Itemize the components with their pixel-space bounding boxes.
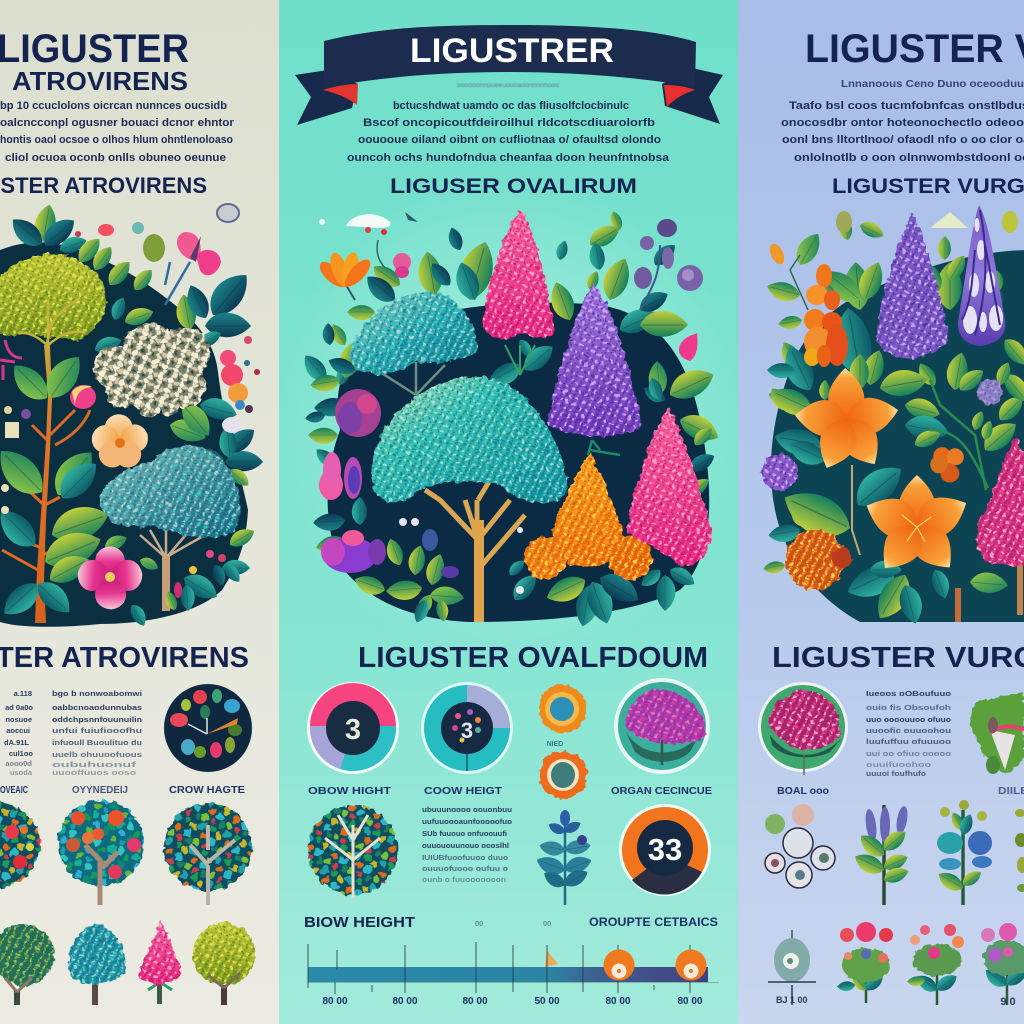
subtitle: Atrovirens: ATROVIRENS	[12, 66, 188, 96]
right text column: ouuifuoohoo	[866, 760, 932, 769]
small round tree	[0, 924, 54, 1005]
orange cone with balls	[524, 454, 652, 580]
intro text block: bp 10 ccuclolons oicrcan nunnces oucsidb	[0, 100, 227, 112]
intro text block: cliol ocuoa oconb onlls obuneo oeunue	[5, 152, 226, 164]
right text column	[866, 689, 952, 778]
pink cone two	[627, 408, 712, 566]
right intro text: onlolnotlb o oon olnnwombstdoonl oo	[794, 152, 1024, 164]
intro text block: hontis oaol ocsoe o olhos hlum ohntlenoloaso	[0, 134, 233, 146]
timeline labels: BIOW HEIGHT	[304, 914, 415, 931]
bouquet one	[837, 922, 893, 1003]
timeline bar	[308, 942, 719, 994]
timeline axis labels: 80 00	[322, 996, 348, 1007]
cell cluster icon	[765, 804, 835, 888]
chart labels: ORGAN CECINCUE	[611, 786, 712, 797]
magenta cluster	[976, 438, 1024, 615]
chart labels: COOW HEIGT	[424, 786, 502, 797]
orange gauge: 33	[648, 832, 682, 867]
text column two: oddchpsnnfouunuilin	[52, 715, 142, 724]
right intro text: onocosdbr ontor hoteonochectlo odeoos	[781, 117, 1024, 129]
intro text block: oalcncconpl ogusner bouaci dcnor ehntor	[0, 117, 235, 129]
label row: CROW HAGTE	[169, 785, 245, 796]
donut chart teal: 3	[461, 718, 473, 743]
timeline labels: OROUPTE CETBAICS	[589, 915, 718, 929]
purple dotted cone	[875, 213, 948, 358]
right text column: uuo oooouuoo ofuuo	[866, 715, 951, 724]
top right plant	[971, 692, 1024, 775]
cloud and specks	[319, 212, 418, 235]
small labels: BOAL ooo	[777, 786, 829, 797]
timeline axis labels: 80 00	[605, 996, 631, 1007]
panel: Liguster atrovirens	[0, 0, 279, 1024]
chart labels: OBOW HIGHT	[308, 786, 391, 797]
ribbon title: LIGUSTRER	[410, 32, 614, 70]
text column one: aooo0d	[5, 759, 32, 768]
small purple cluster	[978, 378, 1002, 406]
centre intro text	[347, 100, 670, 164]
donut chart teal	[421, 682, 513, 774]
text column one	[4, 689, 33, 777]
lilac bush roundel	[614, 678, 710, 774]
text column two: bgo b nonwoabomwi	[52, 689, 142, 698]
branching tree three	[164, 803, 252, 905]
intro text block	[0, 100, 235, 164]
right text column: ouio fis Obsoufoh	[866, 703, 952, 712]
botanical illustration: vurga	[762, 205, 1024, 626]
timeline axis labels: 50 00	[534, 996, 560, 1007]
timeline axis labels	[322, 996, 703, 1007]
tree crown: yellow green	[0, 254, 106, 340]
text column one: a.118	[14, 689, 32, 698]
orange spike flower	[804, 264, 848, 367]
centre text column	[422, 805, 512, 884]
centre intro text: bctucshdwat uamdo oc das fliusolfclocbinulc	[393, 100, 629, 112]
orange blossom cluster	[785, 530, 852, 590]
centre text column: IUIUBfuoofuuoo duuo	[422, 853, 508, 862]
tiny seed label: NIED	[547, 741, 563, 748]
text column one: ad 0a0o	[5, 703, 33, 712]
right intro text: oonl bns lltortlnoo/ ofaodl nfo o oo clor oa	[782, 134, 1024, 146]
label row: OVEAIC	[0, 785, 28, 796]
small labels	[777, 786, 1024, 797]
centre intro text: oouooue oiland oibnt on cufliotnaa o/ ofaultsd olondo	[358, 134, 661, 146]
right text column: Iueoos oOBoufuuo	[866, 689, 952, 698]
donut chart pink	[307, 682, 399, 774]
orange tulip	[320, 252, 370, 300]
centre intro text: Bscof oncopicoutfdeiroilhul rldcotscdiuarolorfb	[363, 117, 655, 129]
text column one: aoccui	[6, 726, 30, 735]
right intro text	[781, 100, 1024, 164]
teal plant	[935, 800, 992, 905]
right text column: luufuffuu ofuuuoo	[866, 737, 952, 746]
right text column: uuoofic ouuoohou	[866, 726, 952, 735]
blue teal tree	[100, 445, 240, 611]
small teal tree	[349, 292, 478, 395]
right text column: uuuoi foufhufo	[866, 769, 926, 778]
timeline axis labels: 80 00	[462, 996, 488, 1007]
purple blobs	[319, 389, 386, 573]
text column two: unfui fuiufiooofhu	[52, 726, 143, 735]
timeline axis labels: 80 00	[392, 996, 418, 1007]
text column one: dA.91L	[4, 738, 29, 747]
olive round tree	[193, 923, 255, 1005]
text column two: uuelb ohuuoofuous	[52, 750, 142, 759]
orange seed flower two	[539, 751, 587, 799]
text column one: cul1oo	[9, 749, 33, 758]
text column one: nosuoe	[5, 715, 32, 724]
blue fern	[534, 810, 594, 905]
cloud and background buds	[836, 211, 1018, 233]
pink cluster right	[220, 336, 260, 433]
lavender plant	[851, 805, 911, 905]
pink flower	[76, 546, 144, 610]
centre intro text: ouncoh ochs hundofndua cheanfaa doon heunfntnobsa	[347, 152, 670, 164]
bouquet two	[907, 924, 964, 1005]
donut chart pink: 3	[345, 714, 361, 746]
orange star flower two	[859, 475, 974, 579]
lower panel heading: LIGUSTER OVALFDOUM	[358, 642, 708, 674]
timeline labels	[304, 914, 718, 931]
pink cone one	[482, 210, 554, 339]
orange star flower one	[794, 367, 901, 475]
centre text column: ouuuofuooo oufuu o	[422, 864, 508, 873]
fruit tree two	[58, 800, 144, 905]
text column two: oabbcnoaodunnubas	[52, 703, 142, 712]
timeline labels: 00	[543, 919, 551, 928]
teal round tree	[68, 924, 126, 1005]
text column two: oubuhuonuf	[52, 760, 137, 769]
botanical illustration: atrovirens	[0, 203, 263, 629]
pink bud right	[679, 333, 697, 361]
centre text column: ounb o fuuooooooon	[422, 875, 506, 884]
right text column: uui oo ofiuo ooooo	[866, 749, 952, 758]
centre text column: uufuuoooaunfooooofuo	[422, 817, 512, 826]
panel: Liguster vurga	[738, 0, 1024, 1024]
partial plant right	[1015, 809, 1024, 892]
centre text column: SUb fuuouo onfuoouufi	[422, 829, 507, 838]
section heading: LIGUSTER VURGA	[832, 175, 1024, 198]
droplet label: BJ 1 00	[776, 995, 808, 1005]
purple cone	[548, 284, 642, 436]
text column one: usoda	[10, 768, 33, 777]
text column two: infuoull Buoulituo du	[52, 738, 142, 747]
purple berries	[634, 219, 703, 310]
timeline axis labels: 80 00	[677, 996, 703, 1007]
text column two	[52, 689, 143, 777]
label row: OYYNEDEIJ	[72, 785, 128, 796]
bouquet three	[981, 923, 1024, 1005]
pink cone tree	[138, 920, 182, 1004]
centre text column: ouuououunouo oooslhl	[422, 841, 509, 850]
small subline: Lnnanoous Ceno Duno oceooduuo	[841, 79, 1024, 90]
bouquet label: 9 0	[1000, 996, 1016, 1008]
round clock icon	[164, 684, 252, 772]
section heading: LIGUSER OVALIRUM	[390, 175, 637, 198]
droplet gauge	[768, 930, 816, 1005]
small labels: DIILE	[998, 786, 1024, 797]
panel: Ligustrer centre	[270, 0, 750, 1024]
orange trunk	[35, 345, 52, 623]
orange seed flower one	[538, 685, 586, 733]
lower panel heading: LIGUSTER VURGA	[772, 642, 1024, 674]
timeline labels: 00	[475, 919, 483, 928]
multi-coloured tree roundel	[308, 805, 398, 898]
botanical illustration: ovalifolium	[298, 210, 723, 628]
purple side cluster	[762, 454, 798, 490]
label row	[0, 786, 244, 793]
peach flower	[92, 414, 148, 468]
text column two: uuooffuuos ooso	[52, 768, 137, 777]
small orange flower	[929, 444, 967, 484]
orange gauge	[619, 804, 711, 896]
small subline: oooooonnuueeuoooaoonnnnnooo	[457, 83, 560, 89]
purple lupine	[958, 205, 1005, 346]
right intro text: Taafo bsl coos tucmfobnfcas onstlbdus	[789, 100, 1024, 112]
magenta bush roundel	[758, 682, 848, 775]
left side small flowers	[0, 340, 31, 514]
centre text column: ubuuunoooo oouonbuu	[422, 805, 512, 814]
flower top right	[143, 232, 221, 305]
ribbon banner	[295, 25, 723, 125]
fruit tree one	[0, 802, 40, 888]
pink bud	[55, 385, 96, 445]
chart labels	[308, 786, 712, 797]
back leaves	[448, 228, 462, 250]
big teal tree	[371, 376, 568, 622]
title: Liguster: LIGUSTER	[0, 27, 189, 71]
white flower cluster	[93, 323, 210, 417]
